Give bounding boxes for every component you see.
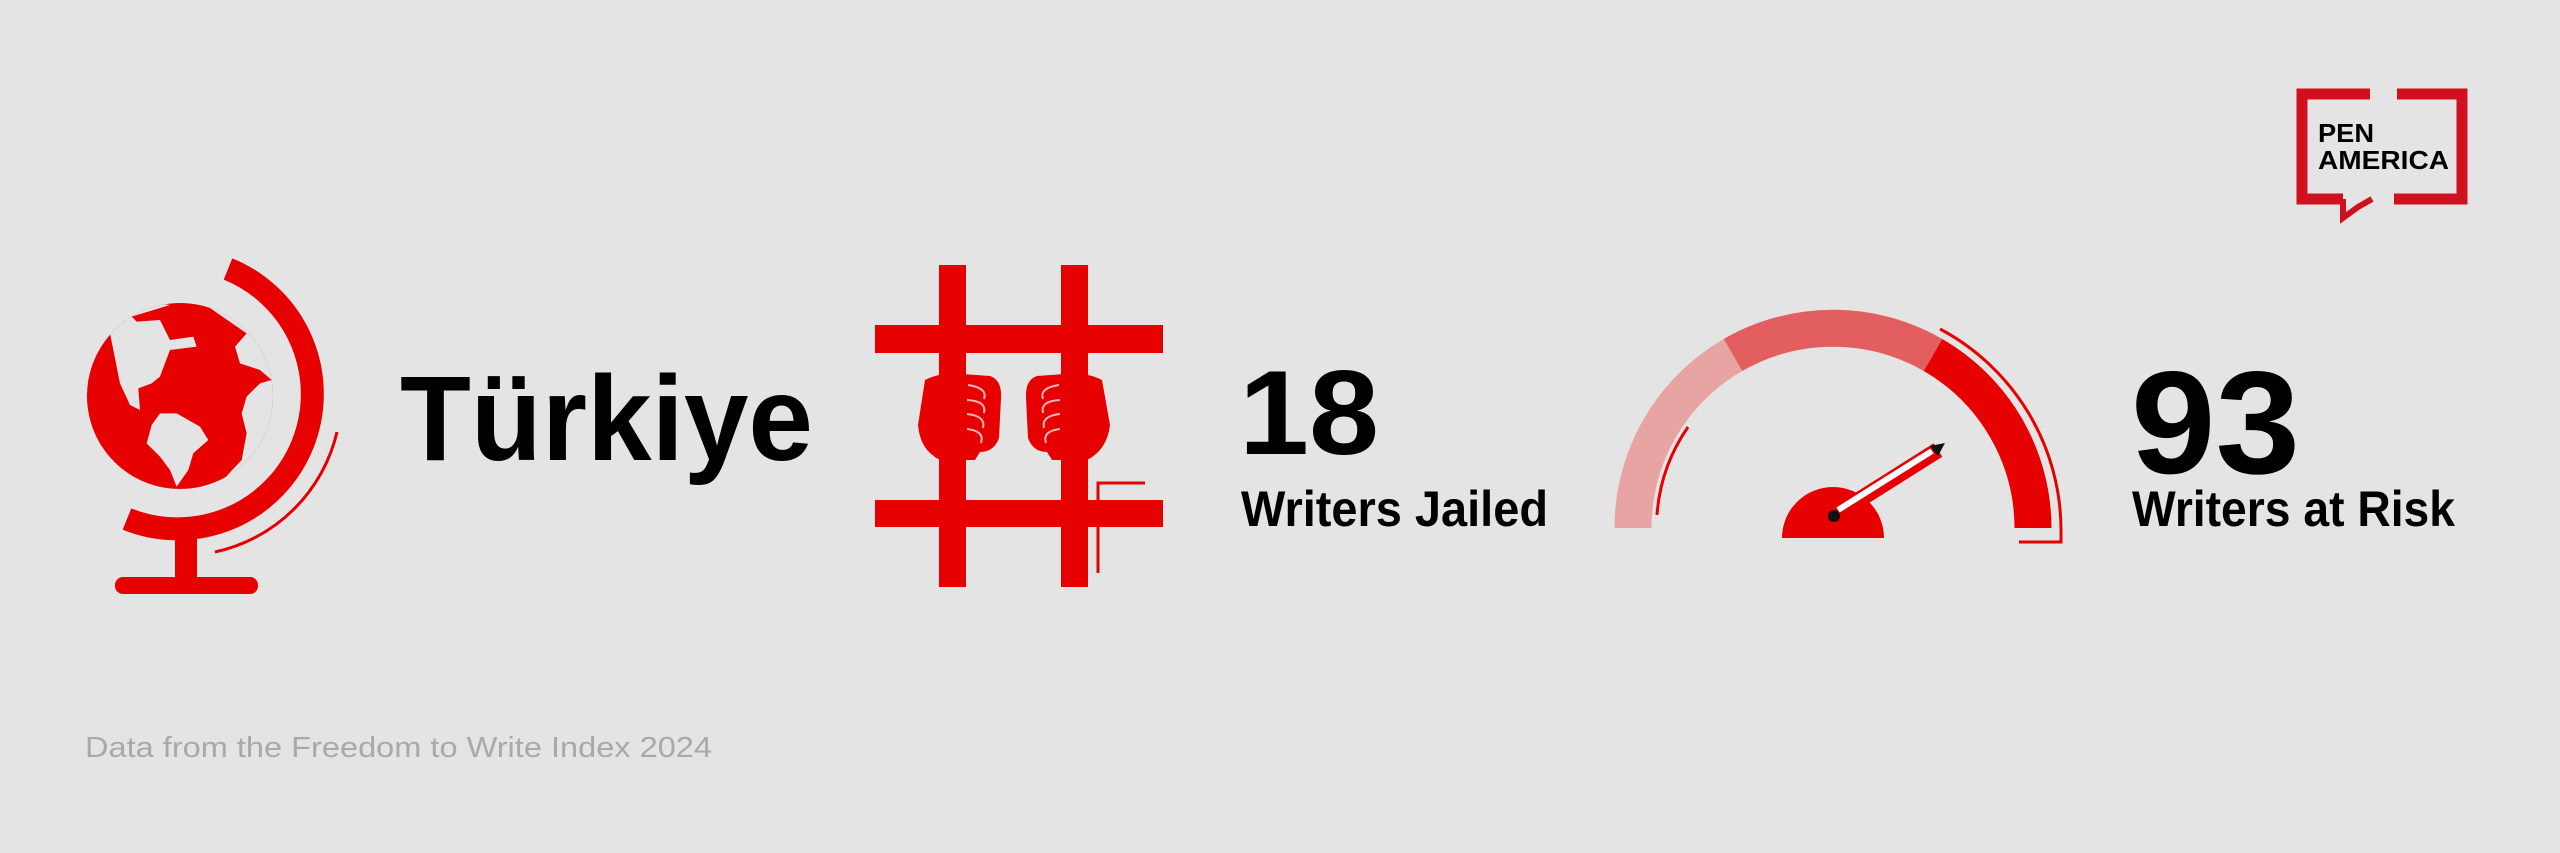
- logo: PEN America: AMERICA: [2318, 145, 2449, 175]
- stat: writers jailed: [1239, 346, 1548, 537]
- gauge: [1633, 328, 2061, 542]
- fist left: [918, 374, 1001, 460]
- icon: prison bars with fists: [875, 265, 1163, 587]
- footer source: Data from the Freedom to Write Index 2024: [85, 732, 712, 764]
- logo: PEN America: PEN: [2318, 118, 2374, 148]
- stat: writers at risk: Writers at Risk: [2132, 481, 2455, 537]
- country name: Türkiye: [400, 350, 813, 486]
- icon: globe: [73, 269, 337, 594]
- logo: PEN America: [2302, 94, 2462, 218]
- stat: writers jailed: 18: [1239, 346, 1379, 480]
- stat: writers at risk: 93: [2131, 341, 2300, 504]
- stat: writers jailed: Writers Jailed: [1241, 481, 1548, 537]
- stat: writers at risk: [2131, 341, 2455, 537]
- needle: [1782, 443, 1945, 538]
- fist right: [1026, 374, 1110, 460]
